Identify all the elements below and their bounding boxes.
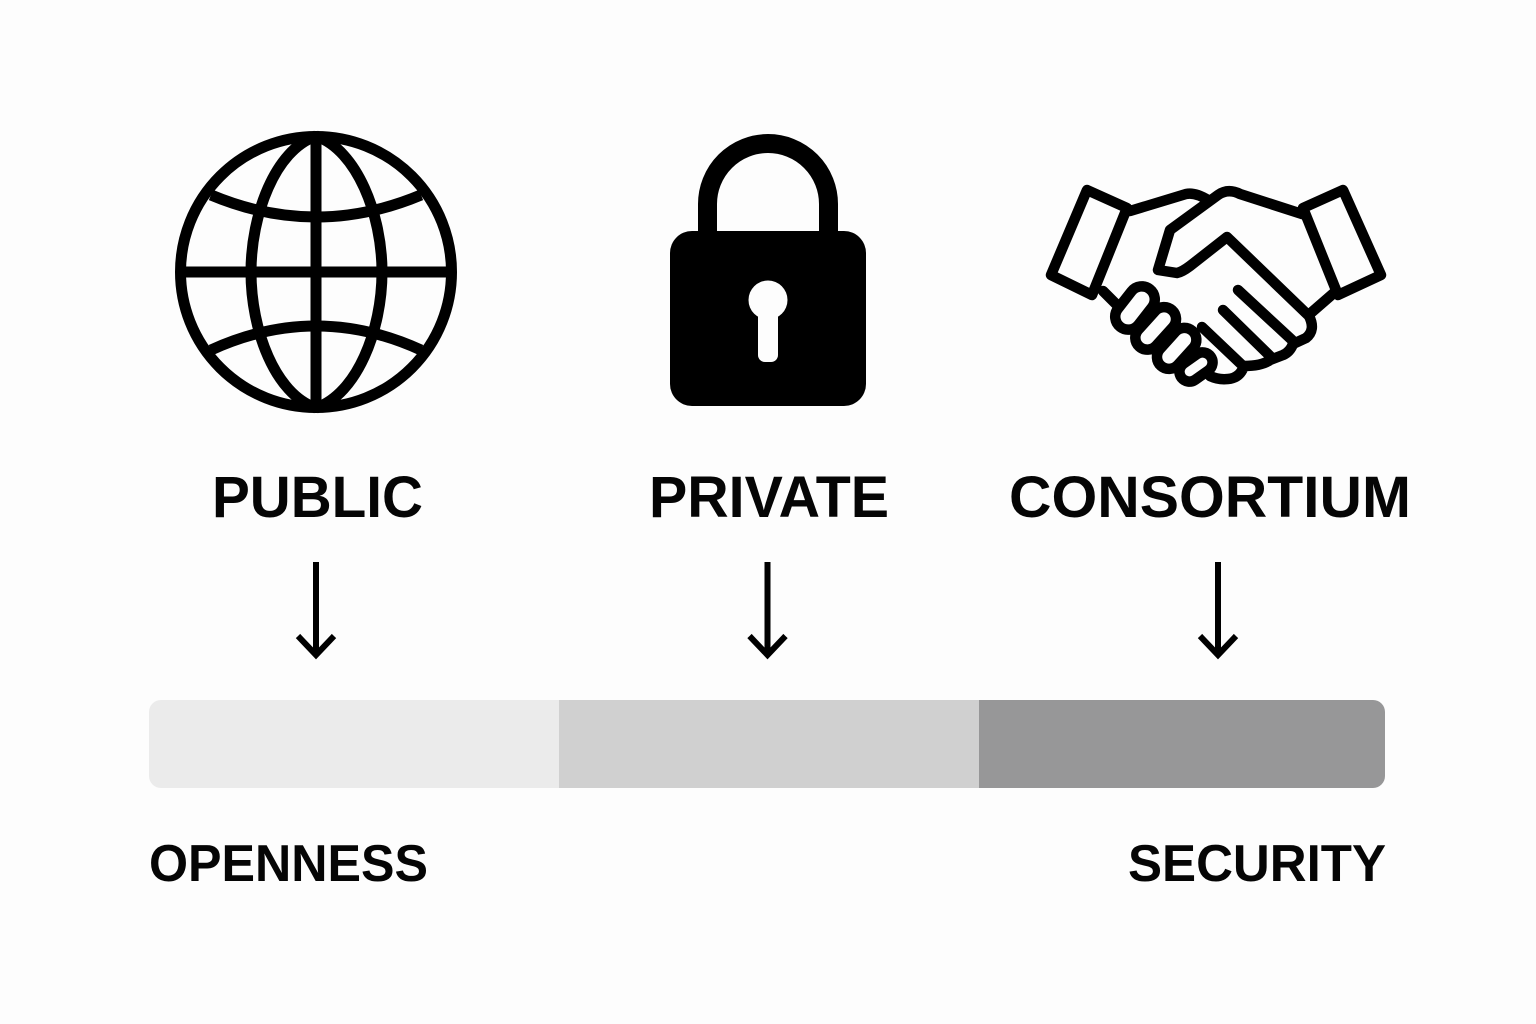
bar segment: security end	[979, 700, 1385, 788]
arrow: consortium	[1200, 562, 1236, 655]
label: security: SECURITY	[1128, 835, 1386, 893]
icon: globe	[180, 136, 452, 408]
heading: private: PRIVATE	[649, 465, 889, 530]
icon: padlock	[670, 144, 866, 406]
bar segment: openness end	[149, 700, 559, 788]
heading: public: PUBLIC	[212, 465, 423, 530]
icon: handshake	[1051, 190, 1381, 386]
arrow: public	[298, 562, 334, 655]
bar segment: middle	[559, 700, 979, 788]
arrow: private	[750, 562, 786, 655]
heading: consortium: CONSORTIUM	[1009, 465, 1411, 530]
label: openness: OPENNESS	[149, 835, 428, 893]
spectrum bar	[149, 700, 1385, 788]
